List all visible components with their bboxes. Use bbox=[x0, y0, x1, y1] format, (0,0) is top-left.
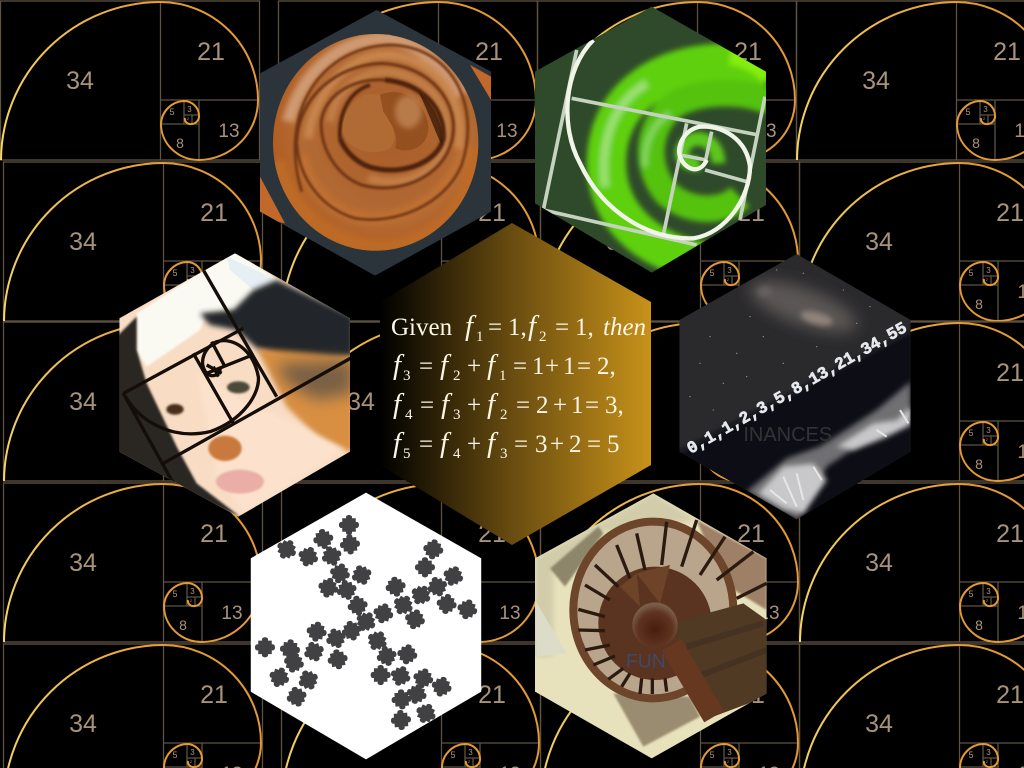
spiral tile row 2 column 3: 5 bbox=[709, 268, 715, 278]
spiral tile row 4 column 3: 13 bbox=[758, 603, 780, 624]
spiral tile row 3 column 2: 34 bbox=[347, 388, 375, 416]
white cliffs bbox=[747, 382, 911, 520]
spiral tile row 5 column 1: 21 bbox=[200, 681, 228, 709]
spiral tile row 1 column 4: 34 bbox=[862, 67, 890, 95]
dark neckline left bbox=[117, 317, 240, 517]
spiral tile row 5 column 3: 2 bbox=[727, 759, 730, 764]
spiral tile row 3 column 3: 3 bbox=[727, 426, 732, 435]
spiral tile row 3 column 4 bbox=[800, 322, 1024, 481]
formula line 4: f bbox=[487, 427, 499, 459]
spiral tile row 3 column 3 bbox=[540, 322, 800, 481]
formula line 4: f bbox=[440, 427, 452, 459]
golden rectangle lines and spiral bbox=[123, 270, 353, 483]
spiral tile row 5 column 1: 3 bbox=[190, 748, 195, 757]
formula line 2: f bbox=[393, 349, 405, 381]
formula line 4: + bbox=[467, 431, 481, 458]
formula line 3: f bbox=[441, 388, 453, 420]
spiral tile row 1 column 3: 34 bbox=[603, 67, 631, 95]
spiral tile row 2 column 1: 5 bbox=[172, 268, 178, 278]
formula line 3: = bbox=[585, 392, 599, 419]
spiral tile row 2 column 2: 5 bbox=[450, 268, 456, 278]
formula line 3: f bbox=[393, 388, 405, 420]
stars bbox=[689, 269, 871, 411]
spiral tile row 2 column 2: 2 bbox=[468, 277, 471, 282]
spiral tile row 1 column 3 bbox=[538, 1, 796, 160]
spiral tile row 2 column 2: 13 bbox=[499, 282, 521, 303]
formula line 1: f bbox=[465, 310, 477, 342]
spiral tile row 3 column 4: 3 bbox=[986, 426, 991, 435]
spiral tile row 4 column 3: 34 bbox=[606, 549, 634, 577]
formula line 4: 4 bbox=[453, 446, 461, 462]
spiral tile row 2 column 4: 3 bbox=[986, 266, 991, 275]
formula line 3: 2 bbox=[536, 392, 548, 419]
spiral tile row 1 column 1: 3 bbox=[187, 105, 192, 114]
spiral tile row 1 column 2: 2 bbox=[465, 116, 468, 121]
spiral tile row 4 column 2 bbox=[282, 483, 540, 642]
spiral tile row 3 column 3: 8 bbox=[716, 456, 724, 472]
spiral tile row 3 column 4: 5 bbox=[968, 428, 974, 438]
neighbouring rolls at corners bbox=[260, 65, 491, 223]
spiral tile row 4 column 2: 8 bbox=[457, 617, 465, 633]
spiral tile row 4 column 3: 3 bbox=[727, 587, 732, 596]
spiral tile row 1 column 4: 8 bbox=[972, 135, 980, 151]
formula line 1: 1, bbox=[575, 314, 594, 341]
spiral tile row 3 column 2 bbox=[282, 322, 540, 481]
formula line 2: 1 bbox=[499, 368, 506, 384]
spiral tile row 1 column 1: 13 bbox=[218, 121, 240, 142]
spiral tile row 3 column 3: 5 bbox=[709, 428, 715, 438]
spiral tile row 5 column 2: 3 bbox=[468, 748, 473, 757]
spiral tile row 5 column 2 bbox=[282, 644, 540, 768]
spiral tile row 5 column 3: 21 bbox=[737, 681, 765, 709]
spiral tile row 4 column 4: 2 bbox=[986, 598, 989, 603]
spiral tile row 5 column 3: 3 bbox=[727, 748, 732, 757]
spiral tile row 1 column 2: 5 bbox=[447, 107, 453, 117]
formula line 3: 3, bbox=[605, 392, 624, 419]
faint word: FUN bbox=[626, 651, 666, 672]
spiral tile row 4 column 1: 34 bbox=[69, 549, 97, 577]
spiral tile row 1 column 2 bbox=[278, 1, 538, 160]
spiral tile row 1 column 2: 8 bbox=[454, 135, 462, 151]
upper right patterned wall bbox=[697, 520, 767, 610]
puzzle pieces bbox=[255, 515, 480, 731]
formula line 2: 2, bbox=[597, 353, 616, 380]
spiral tile row 3 column 4: 21 bbox=[996, 359, 1024, 387]
spiral tile row 4 column 4: 5 bbox=[968, 589, 974, 599]
hexagon photo: portrait with golden spiral bbox=[110, 250, 360, 520]
formula line 3: f bbox=[487, 388, 499, 420]
spiral tile row 3 column 4: 2 bbox=[986, 437, 989, 442]
roll body bbox=[273, 34, 478, 251]
spiral tile row 2 column 1: 21 bbox=[200, 199, 228, 227]
spiral tile row 1 column 3: 13 bbox=[755, 121, 777, 142]
formula line 2: + bbox=[467, 353, 481, 380]
spiral tile row 1 column 1: 2 bbox=[187, 116, 190, 121]
formula line 3: + bbox=[467, 392, 481, 419]
spiral tile row 5 column 1: 34 bbox=[69, 710, 97, 738]
spiral tile row 3 column 1 bbox=[4, 322, 262, 481]
formula line 1: 1 bbox=[476, 329, 484, 345]
formula line 4: 3 bbox=[535, 431, 548, 458]
formula line 4: 5 bbox=[403, 446, 410, 462]
spiral grooves bbox=[295, 45, 468, 220]
white spiral line bbox=[567, 40, 750, 238]
formula line 4: 5 bbox=[607, 431, 620, 458]
formula line 4: + bbox=[550, 431, 564, 458]
spiral tile row 3 column 2: 2 bbox=[468, 437, 471, 442]
hexagon photo: puzzle pieces in spiral arms bbox=[240, 490, 490, 760]
spiral tile row 5 column 4: 34 bbox=[865, 710, 893, 738]
spiral tile row 3 column 3: 21 bbox=[737, 359, 765, 387]
golden rectangle grid lines bbox=[543, 50, 765, 245]
spiral tile row 1 column 3: 5 bbox=[706, 107, 712, 117]
formula line 2: = bbox=[513, 353, 527, 380]
spiral tile row 2 column 3: 8 bbox=[716, 296, 724, 312]
hexagon photo: green spiral with golden ratio overlay bbox=[530, 0, 770, 275]
newel ball bbox=[632, 602, 678, 648]
spiral tile row 4 column 4: 8 bbox=[975, 617, 983, 633]
spiral tile row 2 column 1: 2 bbox=[190, 277, 193, 282]
spiral tile row 2 column 2: 3 bbox=[468, 266, 473, 275]
spiral tile row 4 column 2: 5 bbox=[450, 589, 456, 599]
spiral tile row 2 column 4: 8 bbox=[975, 296, 983, 312]
spiral tile row 2 column 2: 34 bbox=[347, 228, 375, 256]
spiral tile row 4 column 4: 3 bbox=[986, 587, 991, 596]
spiral tile row 1 column 1: 5 bbox=[169, 107, 175, 117]
spiral tile row 4 column 3: 21 bbox=[737, 520, 765, 548]
spiral tile row 4 column 1: 2 bbox=[190, 598, 193, 603]
center hexagon: Fibonacci recurrence formula bbox=[380, 223, 651, 545]
spiral tile row 5 column 2: 2 bbox=[468, 759, 471, 764]
spiral tile row 4 column 4: 21 bbox=[996, 520, 1024, 548]
spiral tile row 3 column 1: 8 bbox=[179, 456, 187, 472]
spiral tile row 5 column 1 bbox=[4, 644, 262, 768]
spiral tile row 1 column 3: 3 bbox=[724, 105, 729, 114]
spiral tile row 3 column 2: 3 bbox=[468, 426, 473, 435]
spiral tile row 2 column 1: 34 bbox=[69, 228, 97, 256]
formula line 4: = bbox=[587, 431, 601, 458]
spiral tile row 5 column 3 bbox=[540, 644, 800, 768]
spiral tile row 4 column 2: 2 bbox=[468, 598, 471, 603]
spiral tile row 2 column 1: 3 bbox=[190, 266, 195, 275]
spiral tile row 4 column 1: 8 bbox=[179, 617, 187, 633]
formula line 4: 3 bbox=[500, 446, 508, 462]
spiral tile row 2 column 1: 13 bbox=[221, 282, 243, 303]
spiral tile row 3 column 2: 21 bbox=[478, 359, 506, 387]
formula line 2: 1 bbox=[563, 353, 576, 380]
spiral tile row 4 column 1: 13 bbox=[221, 603, 243, 624]
spiral tile row 1 column 1: 21 bbox=[197, 38, 225, 66]
spiral tile row 1 column 4 bbox=[796, 1, 1024, 160]
spiral tile row 3 column 1: 34 bbox=[69, 388, 97, 416]
spiral tile row 2 column 4: 2 bbox=[986, 277, 989, 282]
roll center bbox=[342, 94, 395, 152]
spiral tile row 4 column 3: 8 bbox=[716, 617, 724, 633]
face highlight bbox=[243, 423, 344, 514]
spiral tile row 1 column 4: 2 bbox=[983, 116, 986, 121]
spiral tile row 3 column 4: 8 bbox=[975, 456, 983, 472]
formula line 4: f bbox=[393, 427, 405, 459]
roll ridges bbox=[275, 38, 478, 250]
spiral tile row 2 column 3: 34 bbox=[606, 228, 634, 256]
spiral tile row 5 column 4: 3 bbox=[986, 748, 991, 757]
spiral tile row 2 column 2: 8 bbox=[457, 296, 465, 312]
spiral tile row 2 column 2 bbox=[282, 162, 540, 321]
formula line 1: f bbox=[528, 310, 540, 342]
formula line 4: 2 bbox=[569, 431, 582, 458]
formula line 2: 2 bbox=[453, 368, 460, 384]
formula line 2: = bbox=[577, 353, 591, 380]
formula line 1: = bbox=[555, 314, 569, 341]
spiral tile row 2 column 3: 2 bbox=[727, 277, 730, 282]
stair rail ring bbox=[573, 522, 733, 698]
spiral tile row 1 column 2: 34 bbox=[344, 67, 372, 95]
dark horizon band bbox=[677, 330, 913, 523]
spiral tile row 5 column 4: 21 bbox=[996, 681, 1024, 709]
hexagon photo: spiral staircase from above bbox=[530, 490, 770, 760]
spiral tile row 4 column 1 bbox=[4, 483, 262, 642]
spiral tile row 5 column 4: 5 bbox=[968, 750, 974, 760]
green ribbon spiral bbox=[604, 57, 770, 263]
formula line 3: 4 bbox=[405, 407, 413, 423]
spiral tile row 2 column 3 bbox=[540, 162, 800, 321]
formula line 2: + bbox=[545, 353, 559, 380]
formula line 1: = bbox=[488, 314, 502, 341]
spiral tile row 1 column 2: 3 bbox=[465, 105, 470, 114]
spiral tile row 3 column 1: 21 bbox=[200, 359, 228, 387]
spiral tile row 1 column 2: 21 bbox=[475, 38, 503, 66]
spiral tile row 3 column 3: 34 bbox=[606, 388, 634, 416]
spiral tile row 3 column 2: 5 bbox=[450, 428, 456, 438]
spiral tile row 4 column 4: 34 bbox=[865, 549, 893, 577]
spiral tile row 2 column 3: 13 bbox=[758, 282, 780, 303]
formula line 1: then bbox=[603, 314, 646, 341]
spiral tile row 2 column 4: 21 bbox=[996, 199, 1024, 227]
formula line 2: = bbox=[419, 353, 433, 380]
spiral tile row 4 column 4 bbox=[800, 483, 1024, 642]
spiral tile row 3 column 2: 13 bbox=[499, 442, 521, 463]
hair right bbox=[257, 348, 353, 453]
large stair landing right bbox=[677, 603, 767, 717]
spiral tile row 1 column 3: 8 bbox=[713, 135, 721, 151]
spiral tile row 3 column 1: 3 bbox=[190, 426, 195, 435]
spiral tile row 5 column 3: 5 bbox=[709, 750, 715, 760]
newel pole bbox=[672, 645, 714, 717]
white headscarf bbox=[137, 250, 277, 367]
spiral tile row 3 column 4: 34 bbox=[865, 388, 893, 416]
spiral tile row 4 column 2: 21 bbox=[478, 520, 506, 548]
hexagon background gradient bbox=[380, 223, 651, 545]
spiral tile row 1 column 4: 5 bbox=[965, 107, 971, 117]
formula line 4: = bbox=[514, 431, 528, 458]
nose bbox=[208, 436, 242, 461]
spiral tile row 4 column 1: 21 bbox=[200, 520, 228, 548]
formula line 4: = bbox=[419, 431, 433, 458]
spiral tile row 2 column 1: 8 bbox=[179, 296, 187, 312]
spiral tile row 2 column 2: 21 bbox=[478, 199, 506, 227]
spiral tile row 1 column 2: 13 bbox=[496, 121, 518, 142]
spiral tile row 1 column 4: 21 bbox=[993, 38, 1021, 66]
hexagon photo: Milky Way with Fibonacci numbers bbox=[670, 250, 920, 523]
spiral tile row 3 column 3: 2 bbox=[727, 437, 730, 442]
spiral tile row 5 column 1: 5 bbox=[172, 750, 178, 760]
spiral tile row 4 column 3: 5 bbox=[709, 589, 715, 599]
lower mosaic floor bbox=[613, 693, 700, 747]
spiral tile row 3 column 1: 2 bbox=[190, 437, 193, 442]
spiral tile row 2 column 1 bbox=[4, 162, 262, 321]
spiral tile row 1 column 1: 8 bbox=[176, 135, 184, 151]
spiral tile row 2 column 4: 5 bbox=[968, 268, 974, 278]
Fibonacci numbers: 0,1,1,2,3,5,8,13,21,34,55 bbox=[684, 319, 911, 459]
spiral tile row 4 column 2: 3 bbox=[468, 587, 473, 596]
spiral tile row 5 column 2: 21 bbox=[478, 681, 506, 709]
spiral tile row 4 column 2: 34 bbox=[347, 549, 375, 577]
spiral tile row 5 column 1: 2 bbox=[190, 759, 193, 764]
spiral tile row 3 column 1: 13 bbox=[221, 442, 243, 463]
eyes bbox=[166, 404, 184, 415]
formula line 3: = bbox=[420, 392, 434, 419]
spiral tile row 4 column 2: 13 bbox=[499, 603, 521, 624]
cream walls bbox=[530, 490, 770, 760]
spiral tile row 2 column 4: 34 bbox=[865, 228, 893, 256]
spiral tile row 5 column 4: 2 bbox=[986, 759, 989, 764]
spiral tile row 1 column 3: 2 bbox=[724, 116, 727, 121]
spiral tile row 3 column 2: 8 bbox=[457, 456, 465, 472]
formula line 2: 3 bbox=[403, 368, 410, 384]
spiral tile row 3 column 1: 5 bbox=[172, 428, 178, 438]
Milky Way glow bbox=[745, 274, 862, 340]
spiral tile row 4 column 3 bbox=[540, 483, 800, 642]
formula line 2: 1 bbox=[532, 353, 544, 380]
faint word: INANCES bbox=[743, 424, 832, 446]
spiral tile row 4 column 3: 2 bbox=[727, 598, 730, 603]
spiral tile row 5 column 2: 34 bbox=[347, 710, 375, 738]
spiral tile row 4 column 1: 3 bbox=[190, 587, 195, 596]
spiral tile row 5 column 2: 5 bbox=[450, 750, 456, 760]
dark turban bbox=[200, 280, 353, 365]
formula line 3: = bbox=[516, 392, 530, 419]
formula line 2: f bbox=[487, 349, 499, 381]
spiral tile row 1 column 4: 3 bbox=[983, 105, 988, 114]
spiral tile row 5 column 4 bbox=[800, 644, 1024, 768]
formula line 3: 1 bbox=[571, 392, 584, 419]
formula line 2: f bbox=[440, 349, 452, 381]
spiral tile row 1 column 1 bbox=[0, 1, 260, 160]
spiral tile row 2 column 4 bbox=[800, 162, 1024, 321]
lips bbox=[216, 470, 264, 494]
formula line 1: Given bbox=[391, 314, 453, 341]
central steps bbox=[598, 567, 712, 680]
spiral tile row 2 column 3: 3 bbox=[727, 266, 732, 275]
formula line 3: 3 bbox=[453, 407, 460, 423]
formula line 1: 2 bbox=[539, 329, 546, 345]
railing balusters bbox=[578, 520, 767, 694]
formula line 3: + bbox=[553, 392, 567, 419]
formula line 3: 2 bbox=[500, 407, 508, 423]
spiral tile row 4 column 1: 5 bbox=[172, 589, 178, 599]
spiral tile row 5 column 3: 34 bbox=[606, 710, 634, 738]
spiral tile row 3 column 3: 13 bbox=[758, 442, 780, 463]
formula line 1: 1, bbox=[508, 314, 527, 341]
spiral tile row 1 column 1: 34 bbox=[66, 67, 94, 95]
hexagon photo: cinnamon roll bbox=[255, 5, 495, 280]
spiral tile row 1 column 3: 21 bbox=[734, 38, 762, 66]
spiral tile row 2 column 3: 21 bbox=[737, 199, 765, 227]
